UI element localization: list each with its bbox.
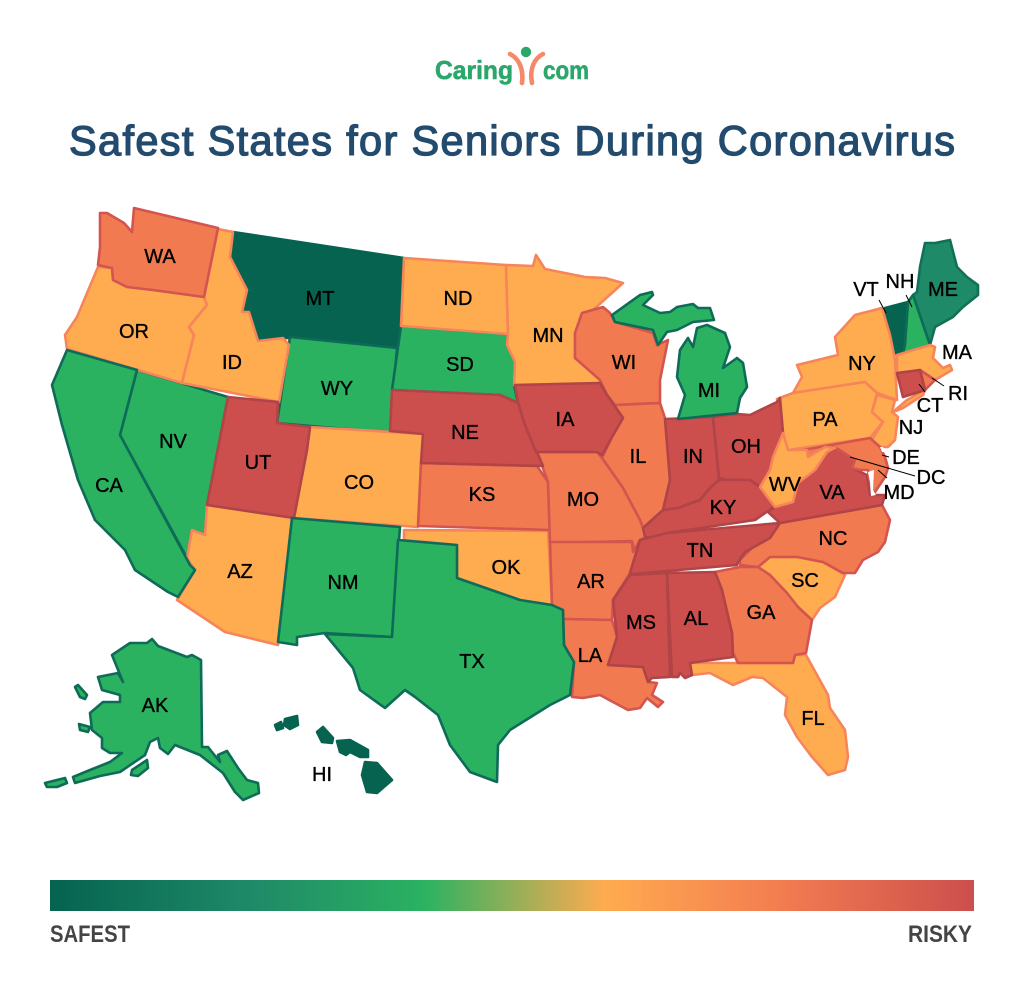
state labels: PA	[812, 409, 838, 431]
state labels: NC	[819, 528, 847, 550]
state labels: FL	[801, 708, 825, 730]
state labels: KY	[710, 497, 736, 519]
state labels: RI	[948, 383, 968, 405]
Alaska	[73, 639, 259, 800]
low-risk states underneath	[230, 232, 404, 348]
state labels: NM	[327, 572, 359, 594]
state labels: IN	[683, 446, 703, 468]
state labels: AL	[684, 608, 708, 630]
state labels: TX	[459, 651, 485, 673]
Chesapeake and Delaware bays	[868, 447, 885, 496]
legend label: safest: SAFEST	[50, 921, 130, 948]
state labels: LA	[578, 645, 603, 667]
state labels: AK	[142, 695, 169, 717]
coral states	[98, 208, 218, 297]
state labels: DE	[892, 447, 920, 469]
state labels: WY	[321, 378, 353, 400]
state labels: CT	[917, 395, 943, 417]
state labels: MT	[306, 288, 334, 310]
state labels: OH	[731, 436, 761, 458]
state labels	[95, 246, 973, 786]
logo: Caring.com: com	[543, 55, 589, 85]
Maryland and Delaware	[803, 438, 888, 495]
state labels: VT	[853, 279, 879, 301]
state labels: UT	[245, 452, 271, 474]
state labels: KS	[469, 484, 495, 506]
state labels: DC	[917, 467, 945, 489]
West Virginia	[760, 433, 835, 507]
state labels: ME	[928, 279, 958, 301]
state labels: NE	[451, 422, 479, 444]
state labels: IL	[630, 446, 646, 468]
leader lines	[850, 295, 944, 478]
state labels: NJ	[899, 417, 923, 439]
state labels: HI	[312, 764, 332, 786]
state labels: MD	[883, 482, 915, 504]
state labels: AZ	[227, 561, 253, 583]
state labels: SD	[446, 354, 474, 376]
state labels: AR	[577, 571, 605, 593]
legend label: risky: RISKY	[908, 921, 972, 948]
logo: Caring.com	[435, 47, 589, 85]
logo: Caring.com: Caring	[435, 55, 513, 85]
state labels: CA	[95, 475, 124, 497]
state labels: ID	[222, 352, 242, 374]
legend gradient bar	[50, 880, 974, 911]
state labels: GA	[747, 602, 776, 624]
state labels: MS	[626, 612, 656, 634]
green states on top	[52, 350, 195, 597]
state labels: WI	[612, 352, 636, 374]
state labels: NY	[848, 353, 876, 375]
map of US states	[45, 208, 978, 800]
state labels: CO	[344, 472, 374, 494]
state labels: MI	[698, 380, 720, 402]
orange states	[65, 267, 207, 383]
state labels: NH	[886, 271, 914, 293]
Hawaii	[275, 722, 283, 730]
red states	[207, 397, 310, 518]
state labels: MN	[532, 325, 564, 347]
state labels: IA	[556, 409, 575, 431]
state labels: SC	[791, 570, 819, 592]
title: Safest States for Seniors During Coronavirus	[69, 117, 955, 164]
state labels: OK	[492, 557, 521, 579]
state labels: WA	[144, 246, 176, 268]
state labels: MA	[942, 342, 973, 364]
state labels: TN	[687, 540, 713, 562]
state labels: WV	[769, 474, 802, 496]
state labels: NV	[159, 431, 188, 453]
state labels: ND	[444, 288, 472, 310]
state labels: OR	[119, 321, 149, 343]
state labels: MO	[567, 489, 599, 511]
state labels: VA	[819, 482, 845, 504]
